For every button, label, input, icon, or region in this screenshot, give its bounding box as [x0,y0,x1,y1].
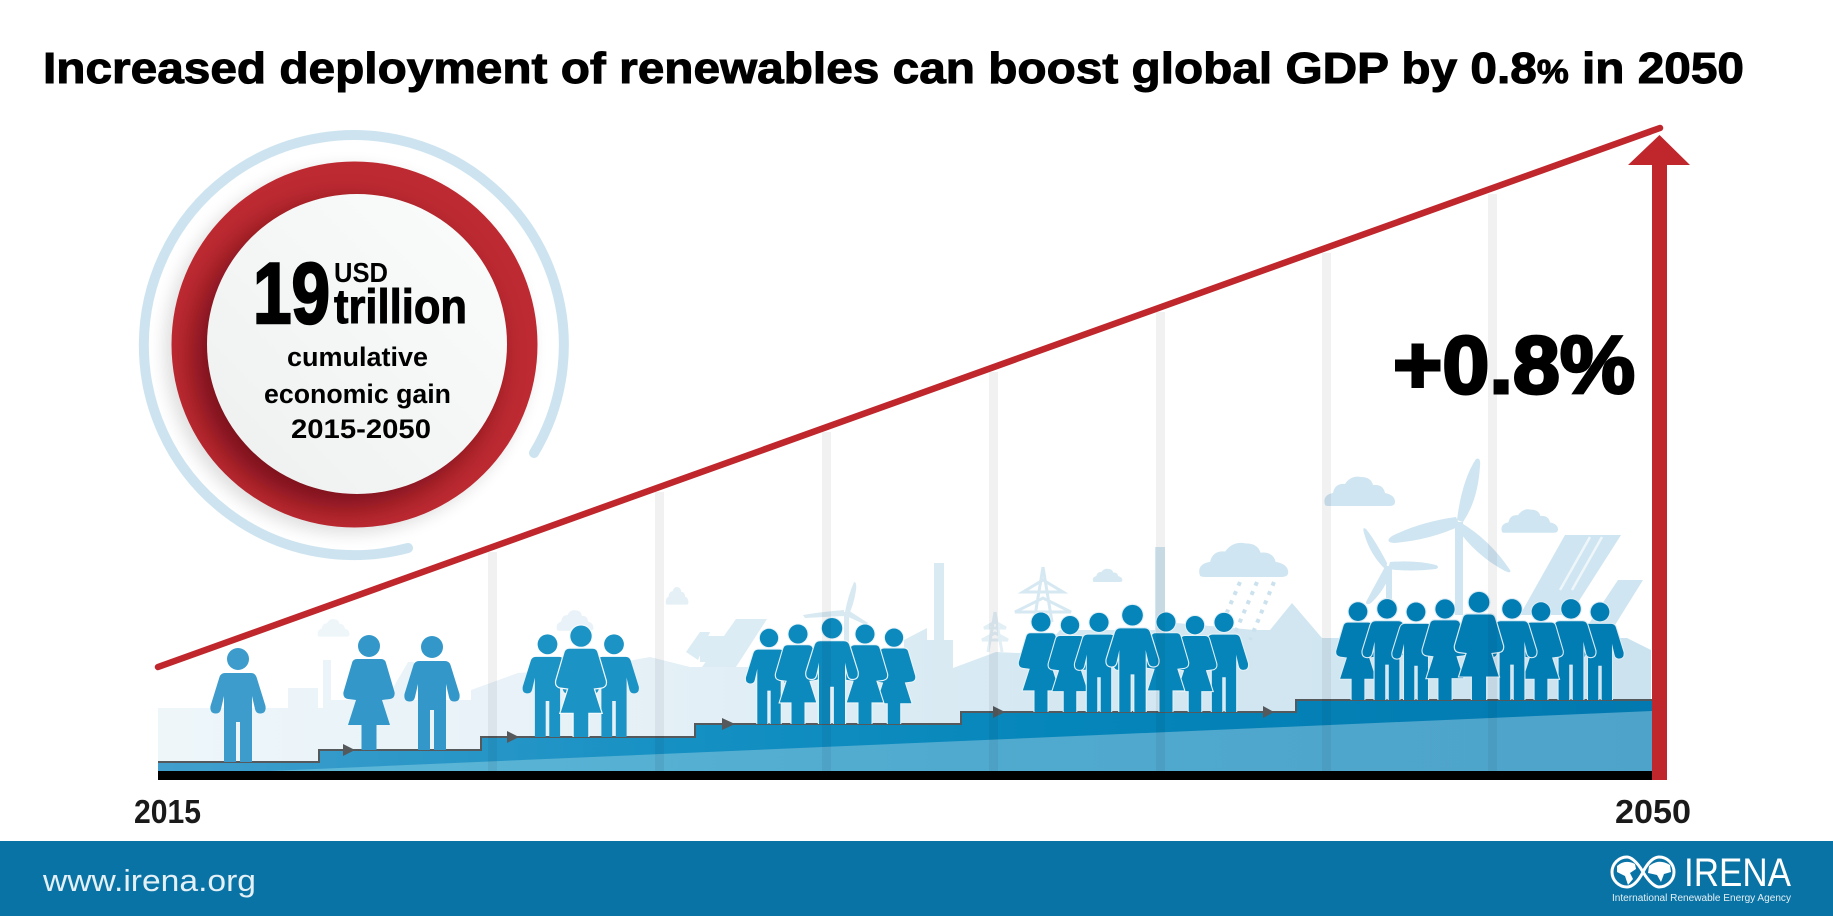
step arrows [343,706,1274,756]
light blue arc [144,135,564,555]
skyline: ground silhouette [158,547,1651,762]
skyline: solar panels centre-left [686,619,767,667]
lighter blue GDP wedge [270,711,1652,771]
red ring [172,162,538,528]
IRENA logo [1612,851,1791,904]
stepped blue growth area [158,700,1652,771]
big +0.8% label: +0.8% [1393,320,1635,411]
skyline: rain cloud [1199,543,1288,640]
USD: USD [334,257,388,288]
people: 2015 single person [210,648,266,762]
white disc [207,194,507,494]
caption line 3: 2015-2050 [291,414,431,444]
inner shadow on ring [193,204,497,508]
year label 2050: 2050 [1615,793,1691,830]
people: pair [343,635,460,750]
footer url: www.irena.org [42,863,256,898]
trillion: trillion [334,281,467,334]
red up arrow [1628,135,1690,780]
number 19: 19 [253,246,330,342]
year label 2015: 2015 [134,793,201,830]
people: group of five [746,618,915,724]
callout: 19 USD trillion circle [144,135,564,555]
logo: infinity globes [1612,857,1674,887]
rising red line [158,128,1660,667]
title: Increased deployment of renewables can boost global GDP by 0.8 % in 2050 [43,44,1744,93]
skyline: small wind turbine centre [803,582,868,670]
caption line 2: economic gain [264,379,451,409]
skyline: solar panels right [1520,535,1643,625]
caption line 1: cumulative [287,342,428,372]
skyline: small clouds [318,477,1558,637]
logo: agency name: International Renewable Energy Agency [1612,893,1791,904]
outer soft shadow [164,166,532,534]
skyline: wind turbines right [1363,459,1510,615]
people: group of nine [1336,592,1624,700]
step outline [158,700,1652,762]
logo: IRENA wordmark: IRENA [1684,851,1791,895]
background skyline illustration [158,459,1651,762]
vertical time bars [488,194,1497,771]
people: group of three [523,625,639,737]
footer band [0,841,1833,916]
skyline: power pylons [982,567,1071,652]
baseline axis [158,771,1652,780]
people: group of seven [1019,605,1248,712]
